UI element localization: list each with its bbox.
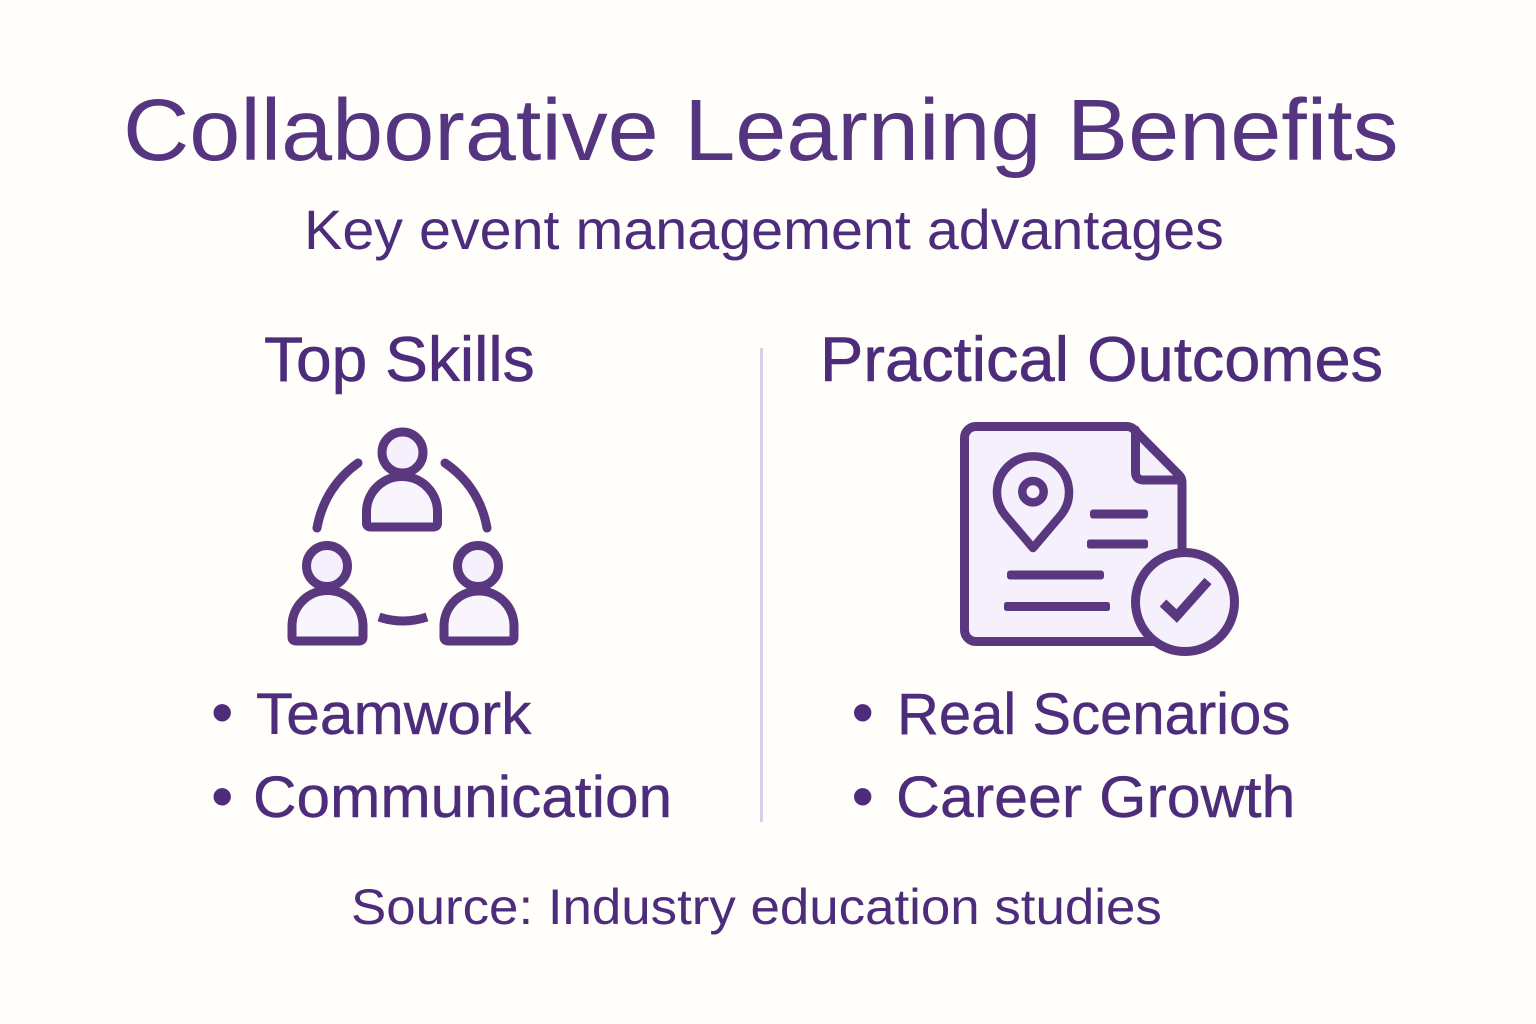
bullet: career growth: Career Growth <box>896 764 1295 830</box>
bullet: communication: Communication <box>253 764 672 830</box>
bullet: communication: • <box>211 760 233 832</box>
icon: document with location pin and check badge <box>960 422 1239 656</box>
icon: three people collaborating <box>288 428 518 646</box>
subtitle: Key event management advantages <box>304 198 1224 260</box>
bullet: real scenarios: Real Scenarios <box>897 682 1290 746</box>
bullet: teamwork: • <box>211 676 233 748</box>
list: top skills <box>211 676 672 832</box>
heading: top skills: Top Skills <box>264 325 535 395</box>
bullet: career growth: • <box>852 760 874 832</box>
column divider <box>760 348 763 822</box>
heading: practical outcomes: Practical Outcomes <box>820 325 1383 395</box>
bullet: real scenarios: • <box>852 676 874 748</box>
bullet: teamwork: Teamwork <box>256 682 531 746</box>
list: practical outcomes <box>852 676 1295 832</box>
source note: Source: Industry education studies <box>351 879 1162 935</box>
title: Collaborative Learning Benefits <box>122 82 1398 179</box>
